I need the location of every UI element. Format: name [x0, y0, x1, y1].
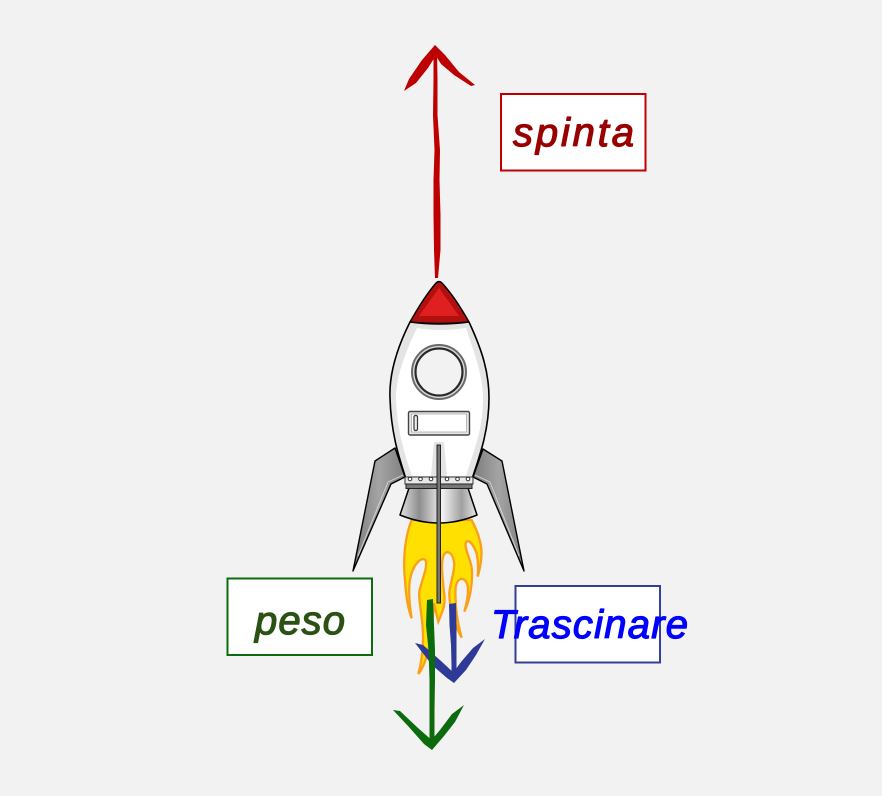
rocket — [353, 282, 524, 674]
central rod — [437, 445, 440, 603]
nose cone — [410, 282, 469, 324]
right fin — [473, 449, 524, 571]
rocket body — [390, 322, 489, 479]
label box: peso — [228, 578, 372, 655]
label box: spinta — [501, 94, 646, 170]
porthole window — [412, 345, 466, 399]
label box: peso: peso — [254, 599, 345, 643]
hatch panel — [408, 412, 470, 435]
label box: spinta: spinta — [513, 111, 634, 155]
arrow: thrust (spinta) — [404, 45, 475, 278]
label box: Trascinare: Trascinare — [491, 603, 688, 647]
flames — [404, 520, 481, 674]
collar with rivets — [405, 477, 473, 488]
label box: Trascinare — [491, 586, 688, 662]
arrow: weight (peso) — [393, 599, 464, 750]
arrow: drag (Trascinare) — [415, 603, 485, 683]
left fin — [353, 448, 405, 571]
nozzle — [400, 488, 477, 523]
